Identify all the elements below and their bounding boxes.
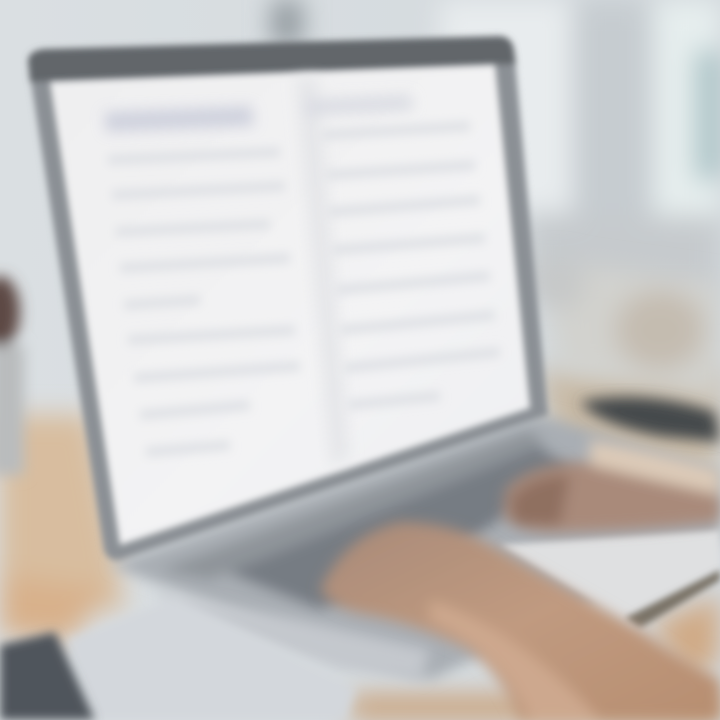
desk surface bbox=[0, 370, 720, 720]
lower keyboard edge bbox=[150, 590, 430, 680]
left hand and forearm bbox=[320, 522, 720, 720]
left edge objects bbox=[0, 276, 24, 475]
pen bbox=[625, 570, 720, 628]
document text lines bbox=[108, 126, 500, 452]
notebook under the right hand bbox=[500, 530, 720, 622]
document columns bbox=[104, 76, 413, 465]
desk items on the right bbox=[535, 260, 720, 400]
laptop lid bezel bbox=[28, 36, 548, 560]
paper on the desk, lower left bbox=[68, 598, 355, 720]
right hand upper bbox=[503, 440, 720, 532]
dark object bottom left bbox=[0, 632, 95, 720]
laptop screen showing a document bbox=[50, 65, 530, 545]
laptop deck and keyboard bbox=[110, 415, 720, 680]
dark object on the right bbox=[580, 397, 720, 442]
